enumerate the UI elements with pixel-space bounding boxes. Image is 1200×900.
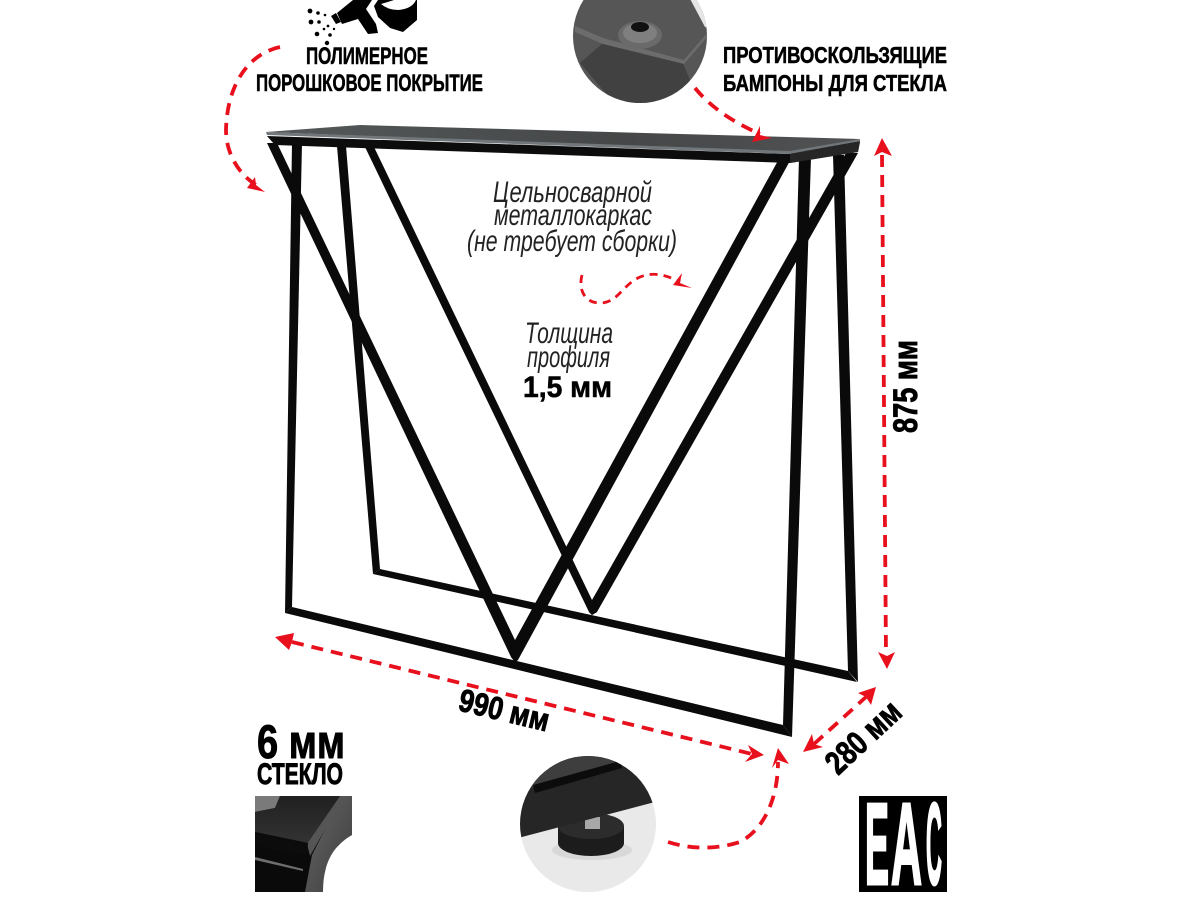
note: profile thickness: профиля bbox=[527, 341, 610, 374]
callout: adjustable foot bbox=[518, 748, 789, 896]
heading text: СТЕКЛО bbox=[257, 758, 343, 791]
heading text bbox=[723, 42, 947, 96]
table illustration bbox=[266, 125, 860, 737]
note: profile thickness bbox=[523, 317, 613, 404]
heading text: БАМПОНЫ ДЛЯ СТЕКЛА bbox=[723, 70, 947, 96]
callout: polymer powder coating bbox=[226, 0, 483, 192]
heading text bbox=[256, 43, 483, 97]
dimension: height 875 mm bbox=[874, 138, 925, 669]
heading text bbox=[257, 715, 345, 791]
diagonal braces bbox=[267, 143, 858, 662]
glass tabletop bbox=[266, 125, 860, 163]
dimension: width 990 mm bbox=[275, 633, 764, 762]
dimension: depth 280 mm: 280 мм bbox=[818, 693, 909, 781]
note: welded frame: (не требует сборки) bbox=[467, 225, 677, 258]
callout: anti-slip bumpers bbox=[570, 0, 947, 142]
icon: EAC certification mark bbox=[859, 778, 947, 900]
photo: glass edge bbox=[255, 796, 352, 892]
note: welded frame: Цельносварной bbox=[493, 176, 652, 209]
note: welded frame bbox=[467, 176, 677, 258]
note: welded frame: металлокаркас bbox=[494, 199, 652, 232]
heading text: 6 мм bbox=[257, 715, 345, 768]
note: profile thickness: Толщина bbox=[525, 317, 613, 350]
heading text: ПОРОШКОВОЕ ПОКРЫТИЕ bbox=[256, 70, 483, 97]
callout: glass thickness bbox=[255, 715, 352, 892]
back frame bbox=[337, 146, 858, 682]
arrow: foot to base bbox=[668, 748, 789, 848]
infographic canvas bbox=[224, 0, 947, 892]
arrow: note to frame bbox=[581, 273, 692, 303]
heading text: ПОЛИМЕРНОЕ bbox=[306, 43, 428, 70]
arrow: coating to frame bbox=[226, 47, 280, 192]
front frame bbox=[285, 143, 811, 737]
dimension: width 990 mm: 990 мм bbox=[455, 682, 553, 738]
photo: foot closeup bbox=[520, 756, 656, 892]
note: profile thickness: 1,5 мм bbox=[523, 371, 612, 404]
dimension: depth 280 mm bbox=[803, 687, 909, 781]
icon: spray gun bbox=[308, 0, 417, 45]
photo: bumper closeup bbox=[573, 0, 707, 103]
dimension: height 875 mm: 875 мм bbox=[887, 340, 925, 433]
arrow: bumper to tabletop bbox=[695, 88, 772, 142]
heading text: ПРОТИВОСКОЛЬЗЯЩИЕ bbox=[723, 42, 947, 68]
